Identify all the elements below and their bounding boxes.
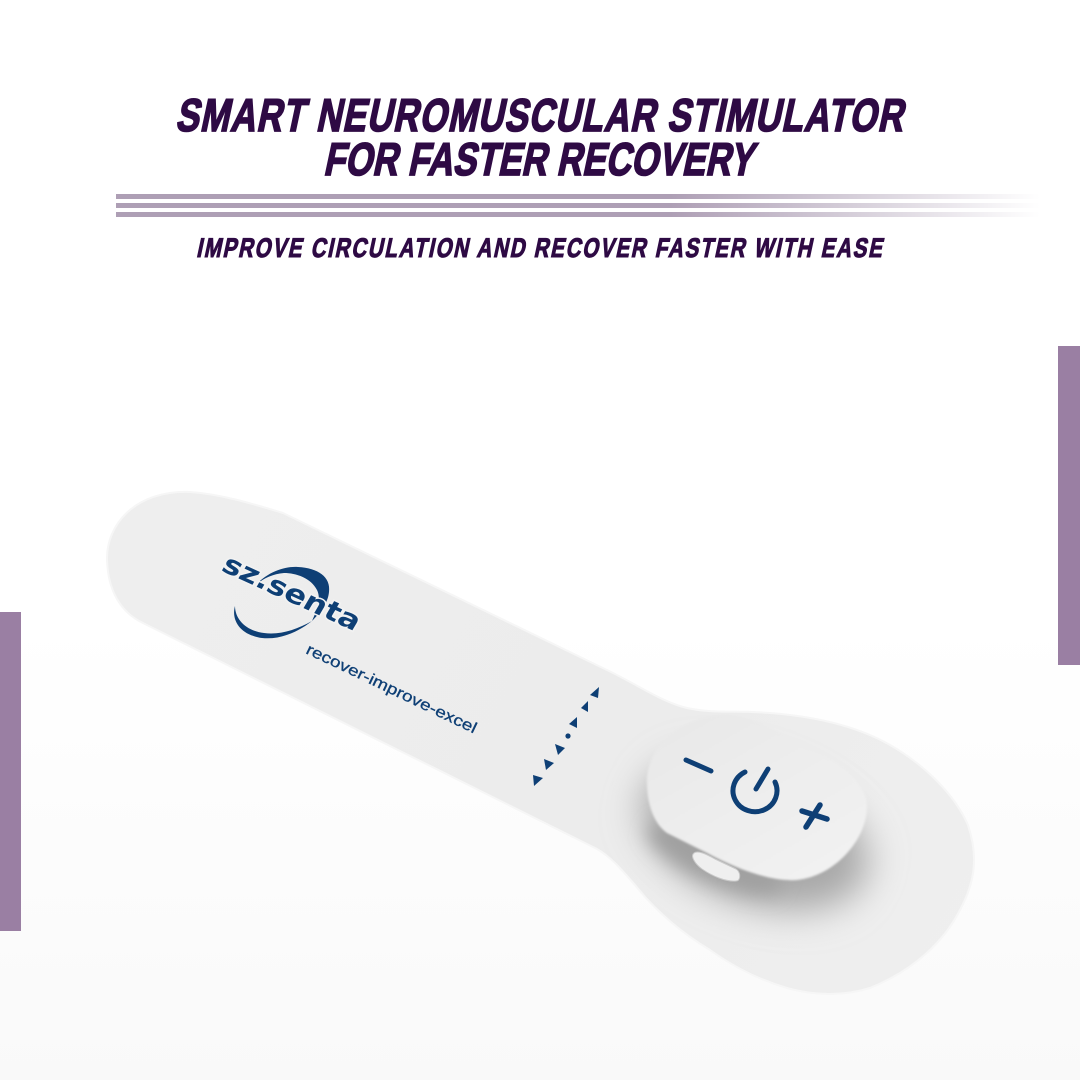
icon: minus [686,760,711,771]
device: neuromuscular stimulator [107,492,974,994]
side port [693,852,740,881]
icon: plus [802,805,827,827]
icon: power [733,769,777,812]
logo text: sz.senta [216,549,367,637]
title [173,89,911,185]
divider lines [116,194,1040,217]
title: FOR FASTER RECOVERY [321,133,761,185]
button shadow [624,760,886,930]
right accent bar [1058,346,1080,665]
subtitle: IMPROVE CIRCULATION AND RECOVER FASTER WITH EASE [195,234,886,264]
control button [647,715,867,880]
device body strap [107,492,974,994]
alignment arrows [533,687,599,786]
tagline: recover-improve-excel [303,641,479,737]
title: SMART NEUROMUSCULAR STIMULATOR [173,89,911,141]
left accent bar [0,612,21,931]
logo swoosh [234,567,329,638]
